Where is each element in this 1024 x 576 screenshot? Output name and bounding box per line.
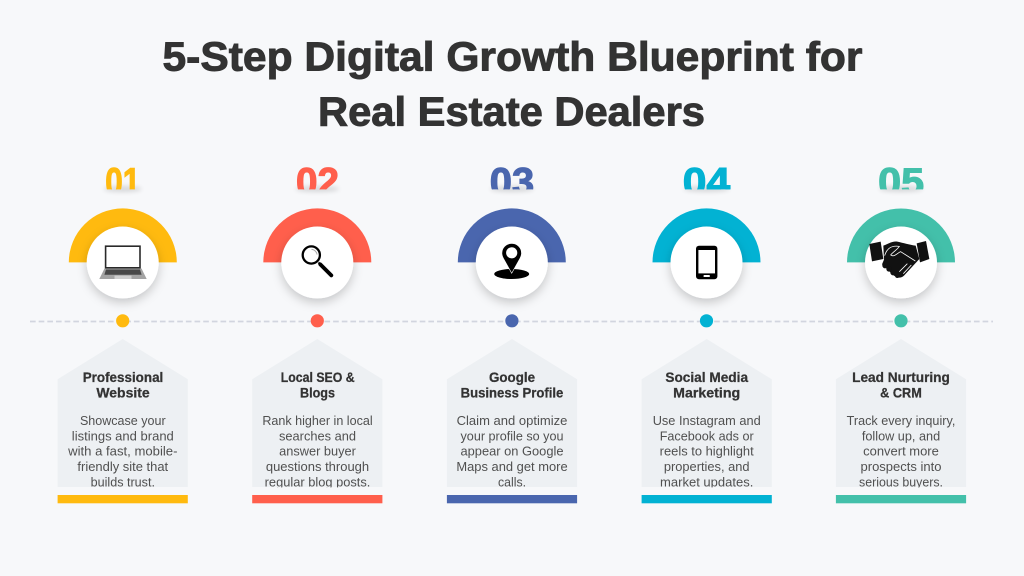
step 4: social media marketing	[642, 161, 772, 503]
description: your profile so you	[460, 428, 564, 443]
description: builds trust.	[91, 474, 155, 489]
description: regular blog posts.	[265, 474, 370, 489]
icon circle	[281, 226, 353, 298]
step number 04: 04	[683, 161, 731, 204]
description: follow up, and	[862, 428, 940, 443]
description: market updates.	[660, 474, 753, 489]
description: Use Instagram and	[653, 413, 761, 428]
description	[456, 413, 568, 489]
step number 01	[104, 167, 140, 194]
step 5: lead nurturing and crm	[836, 161, 966, 503]
heading: Local SEO &	[281, 370, 355, 385]
description: friendly site that	[77, 459, 169, 474]
step 2: local seo and blogs	[252, 161, 382, 503]
timeline dot	[505, 314, 518, 327]
accent bar	[58, 495, 188, 503]
description: searches and	[279, 428, 356, 443]
timeline dot	[700, 314, 713, 327]
heading: Professional	[83, 370, 163, 385]
icon: smartphone	[696, 246, 717, 279]
accent bar	[447, 495, 577, 503]
accent bar	[642, 495, 772, 503]
step number 04	[684, 167, 731, 194]
heading: Business Profile	[461, 385, 564, 400]
heading: Lead Nurturing	[852, 370, 950, 385]
icon circle	[865, 226, 937, 298]
description: Claim and optimize	[457, 413, 567, 428]
description	[653, 413, 761, 489]
heading: Google	[489, 370, 535, 385]
description: with a fast, mobile-	[67, 444, 177, 459]
icon circle	[476, 226, 548, 298]
description: calls.	[498, 474, 526, 489]
heading	[852, 370, 950, 400]
icon: laptop	[99, 246, 147, 279]
semicircle arc	[458, 208, 566, 262]
step number 02	[296, 167, 338, 194]
title: Real Estate Dealers	[318, 88, 705, 134]
step 1: professional website	[58, 161, 188, 503]
icon: handshake	[869, 241, 929, 278]
step number 03	[490, 167, 534, 194]
semicircle arc	[263, 208, 371, 262]
heading: Social Media	[665, 370, 748, 385]
step 3: google business profile	[447, 161, 577, 503]
description: properties, and	[664, 459, 750, 474]
heading: Website	[96, 385, 150, 400]
icon: map pin	[494, 244, 529, 279]
info panel	[447, 339, 577, 487]
heading	[461, 370, 564, 400]
heading	[665, 370, 748, 400]
accent bar	[252, 495, 382, 503]
info panel	[252, 339, 382, 487]
description: Track every inquiry,	[847, 413, 955, 428]
description	[67, 413, 177, 489]
step number 02: 02	[296, 161, 339, 204]
accent bar	[836, 495, 966, 503]
title	[162, 34, 863, 134]
description: convert more	[863, 444, 939, 459]
semicircle arc	[652, 208, 760, 262]
info panel	[58, 339, 188, 487]
description: serious buyers.	[859, 474, 943, 489]
description: questions through	[266, 459, 369, 474]
description: reels to highlight	[660, 444, 754, 459]
description: answer buyer	[279, 444, 357, 459]
description	[847, 413, 955, 489]
description: Maps and get more	[456, 459, 568, 474]
heading	[83, 370, 163, 400]
step number 03: 03	[490, 161, 534, 204]
info panel	[836, 339, 966, 487]
icon: magnifying glass	[303, 246, 331, 275]
step number 05	[879, 167, 924, 194]
description: Rank higher in local	[262, 413, 373, 428]
timeline dot	[311, 314, 324, 327]
icon circle	[87, 226, 159, 298]
timeline dot	[894, 314, 908, 327]
heading: & CRM	[880, 385, 922, 400]
heading: Marketing	[673, 385, 740, 400]
icon circle	[670, 226, 742, 298]
semicircle arc	[69, 208, 177, 262]
title: 5-Step Digital Growth Blueprint for	[162, 34, 863, 80]
description	[262, 413, 373, 489]
description: listings and brand	[72, 428, 174, 443]
description: Facebook ads or	[660, 428, 754, 443]
heading: Blogs	[300, 385, 335, 400]
description: appear on Google	[460, 444, 564, 459]
step number 01: 01	[105, 161, 140, 204]
semicircle arc	[847, 208, 955, 262]
info panel	[642, 339, 772, 487]
description: prospects into	[860, 459, 942, 474]
step number 05: 05	[878, 161, 924, 204]
description: Showcase your	[80, 413, 166, 428]
timeline dot	[116, 314, 129, 327]
heading	[281, 370, 355, 400]
